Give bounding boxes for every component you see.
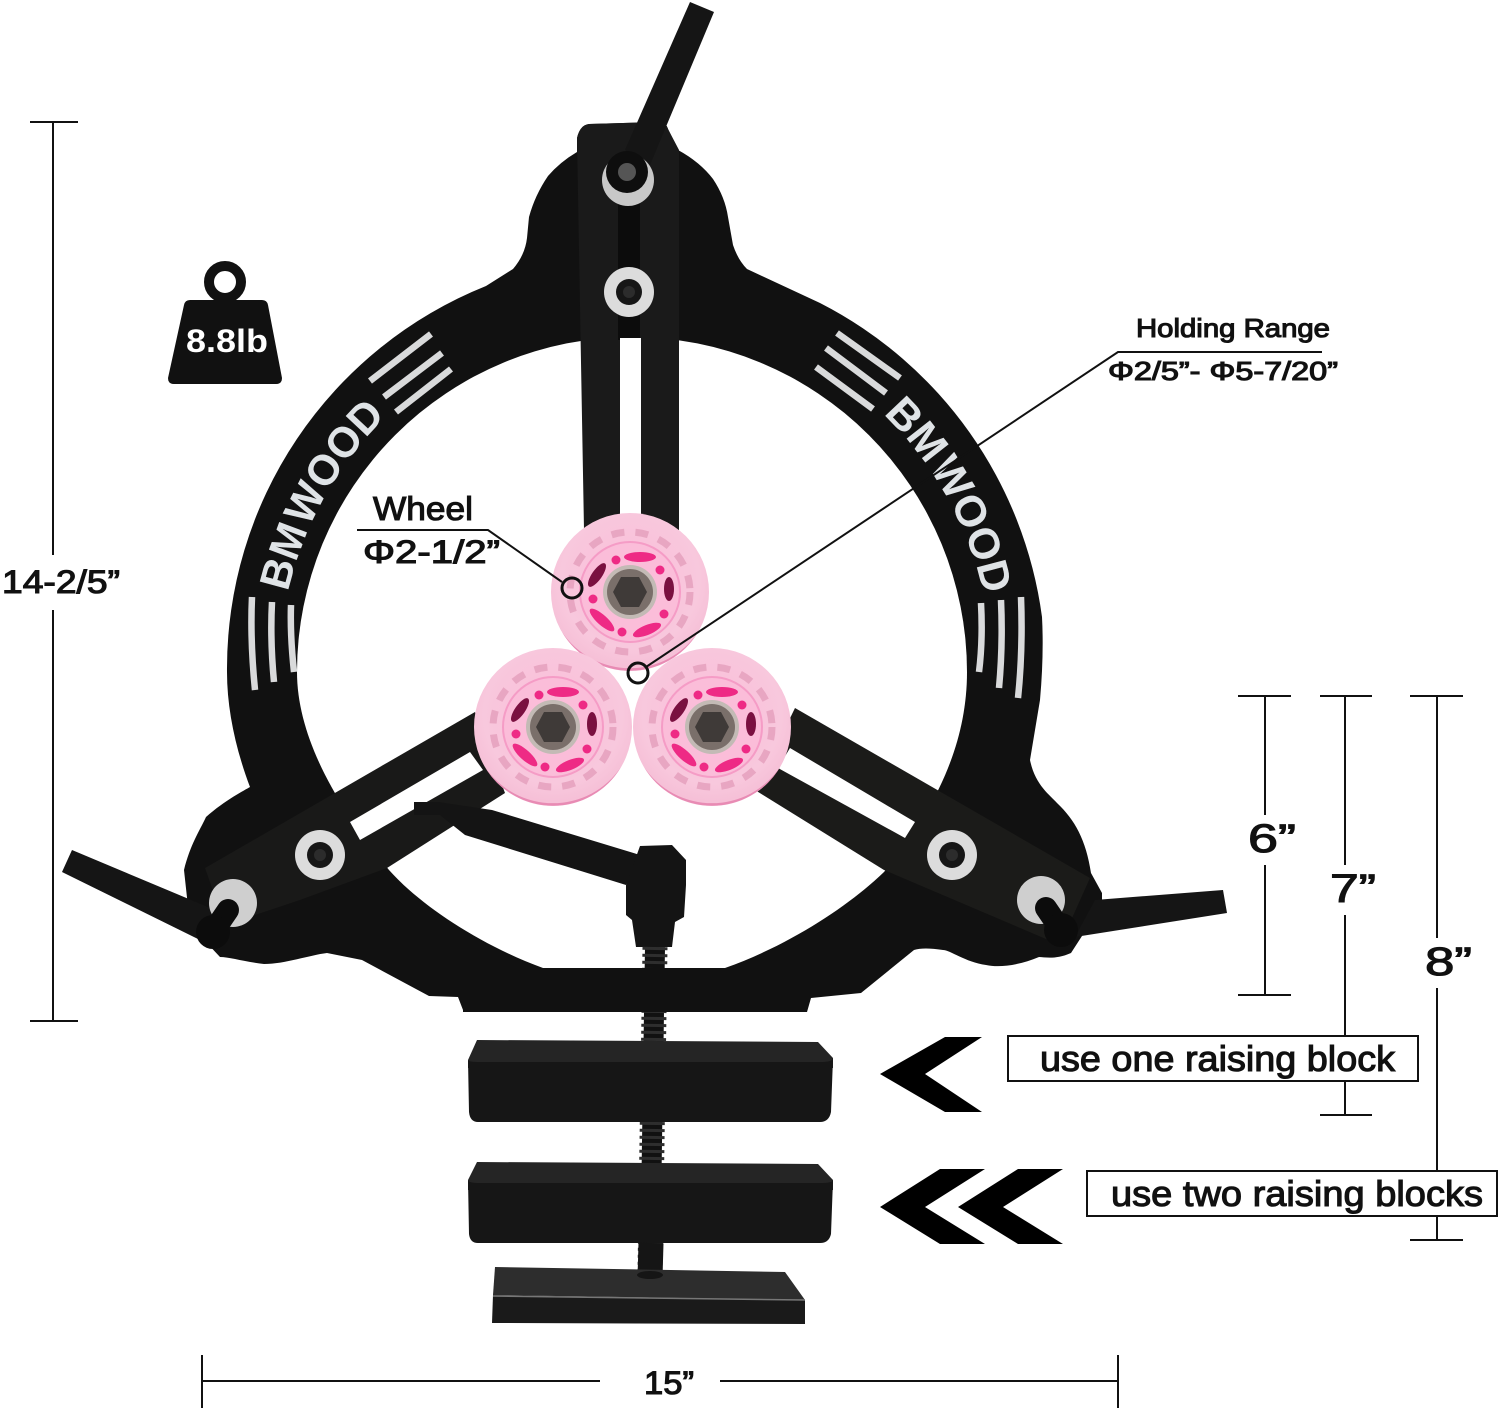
weight icon 8.8lb <box>168 266 282 384</box>
top washer <box>602 154 654 206</box>
right end washer <box>1017 876 1065 924</box>
dimension: 6 inch <box>1238 696 1296 995</box>
dimension: 7 inch <box>1320 696 1376 1115</box>
left handle <box>62 850 215 940</box>
weight icon 8.8lb: 8.8lb <box>186 323 268 359</box>
callout: wheel diameter: Wheel <box>373 490 473 527</box>
right handle <box>1075 890 1227 937</box>
chevron: one block <box>880 1037 982 1112</box>
left lower arm with slot <box>205 712 505 925</box>
rod stub over base plate <box>650 1243 651 1278</box>
raising block two <box>468 1162 833 1243</box>
chevrons: two blocks <box>880 1169 1063 1244</box>
dimension: 8 inch: 8” <box>1425 940 1472 984</box>
lower jaw plate of frame <box>463 968 807 1012</box>
left end washer <box>209 879 257 927</box>
top slot washer <box>604 267 654 317</box>
dimension: width 15: 15” <box>644 1365 694 1401</box>
callout: wheel diameter: Φ2-1/2” <box>363 534 500 570</box>
frame: ring body with lobes <box>184 122 1102 1012</box>
right end bolt <box>1044 908 1078 947</box>
dimension: 8 inch <box>1410 696 1472 1240</box>
dimension: height 14-2/5: 14-2/5” <box>2 564 120 600</box>
brand text and stripes: BM WOOD <box>260 402 380 590</box>
callout: holding range: Φ2/5”- Φ5-7/20” <box>1108 356 1338 386</box>
dimension: 6 inch: 6” <box>1248 817 1296 861</box>
wheel top <box>551 513 709 671</box>
raising block one <box>468 1040 833 1122</box>
wheel bottom right <box>633 648 791 806</box>
callout: holding range <box>628 313 1338 683</box>
dimension: 7 inch: 7” <box>1330 867 1376 911</box>
callout: use one raising block: use one raising block <box>1040 1038 1396 1079</box>
clamp lever and knob <box>414 802 686 947</box>
left end bolt <box>196 910 230 949</box>
left slot washer <box>295 830 345 880</box>
callout: use two raising blocks: use two raising blocks <box>1111 1173 1483 1214</box>
right slot washer <box>927 830 977 880</box>
top arm with slot <box>577 122 679 530</box>
wheel bottom left <box>474 648 632 806</box>
callout: wheel diameter <box>357 490 582 598</box>
top handle <box>625 2 714 165</box>
brand text and stripes <box>248 330 1025 698</box>
dimension: width 15 <box>202 1355 1118 1408</box>
base plate <box>492 1267 805 1324</box>
callout: holding range: Holding Range <box>1136 313 1330 343</box>
dimension: height 14-2/5 <box>2 122 120 1021</box>
brand text and stripes: BM WOOD <box>885 396 1009 590</box>
top bolt <box>606 151 648 193</box>
threaded rod <box>650 947 655 1272</box>
right lower arm with slot <box>755 708 1090 945</box>
